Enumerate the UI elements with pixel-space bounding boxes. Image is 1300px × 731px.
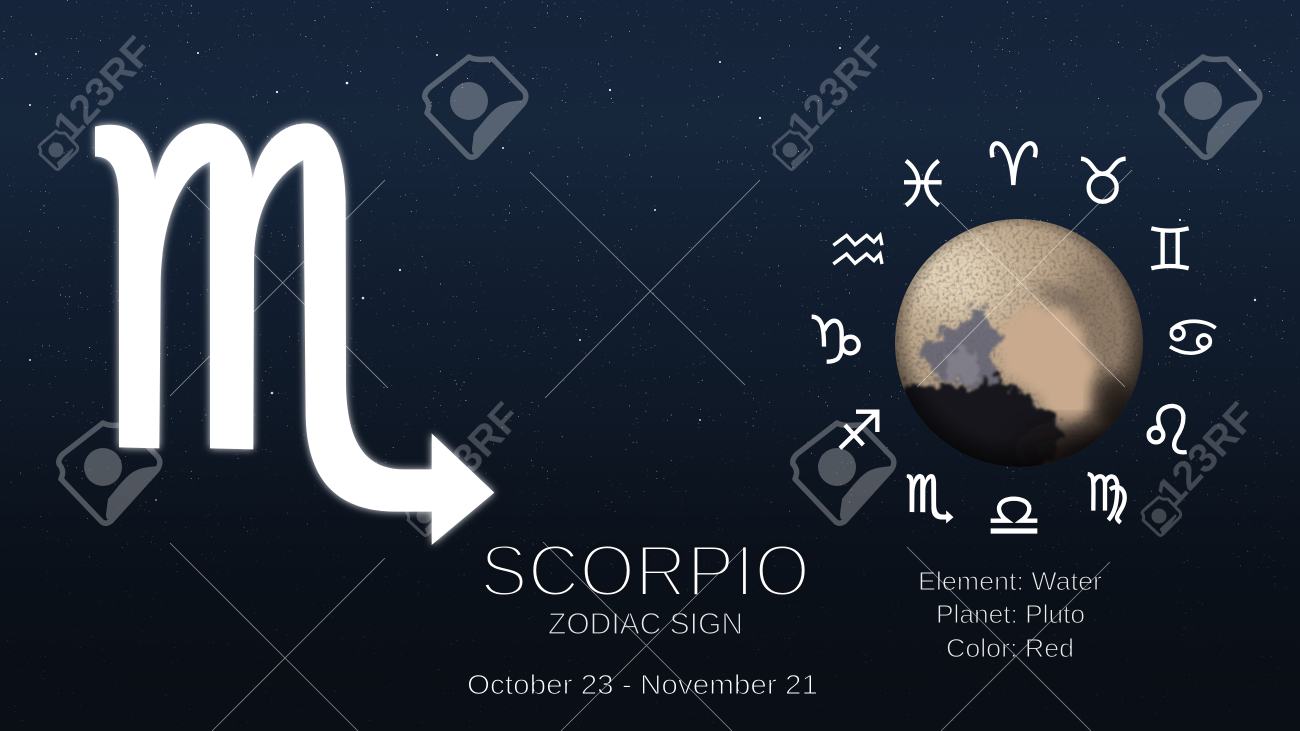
element: Element: Water [918, 566, 1102, 596]
infographic: Scorpio zodiac sign: 123RF [1147, 394, 1265, 515]
icon: capricorn [812, 317, 859, 362]
title: SCORPIO: SCORPIO [480, 531, 810, 612]
infographic: Scorpio zodiac sign: 123RF [412, 394, 530, 515]
icon: cancer [1170, 321, 1216, 353]
big Scorpio glyph with glow [95, 123, 494, 545]
ridge mark [1030, 278, 1088, 314]
ruling planet: Planet: Pluto [936, 599, 1085, 629]
lower shadow [1044, 410, 1108, 464]
zodiac wheel icons [812, 143, 1216, 531]
pale frost patch [945, 350, 983, 382]
subtitle: ZODIAC SIGN: ZODIAC SIGN [548, 606, 743, 641]
limb darkening [895, 219, 1143, 467]
icon: aquarius [833, 235, 882, 264]
icon: libra [991, 499, 1037, 531]
icon: virgo [1088, 474, 1125, 523]
icon: gemini [1151, 228, 1189, 268]
planet base [895, 219, 1143, 467]
colour: Color: Red [946, 633, 1074, 663]
sign facts [918, 566, 1102, 663]
blue-gray terrain [917, 307, 1003, 387]
heart plain [997, 306, 1095, 424]
icon: taurus [1081, 159, 1126, 202]
infographic: Scorpio zodiac sign: 123RF [778, 28, 896, 149]
icon: pisces [904, 161, 942, 205]
planet: Pluto [890, 215, 1150, 475]
speckle texture [895, 219, 1142, 432]
right dusky terrain [1059, 257, 1124, 369]
northern highlight [904, 239, 992, 311]
icon: sagittarius [840, 412, 877, 448]
infographic: Scorpio zodiac sign: 123RF [44, 28, 162, 149]
bright stars [29, 47, 1256, 501]
icon: leo [1149, 406, 1187, 452]
icon: scorpio small [907, 474, 953, 523]
right shadow [1094, 374, 1130, 426]
dark southern terrain [905, 375, 1063, 475]
icon: aries [992, 143, 1036, 185]
date range: October 23 - November 21 [467, 669, 818, 700]
